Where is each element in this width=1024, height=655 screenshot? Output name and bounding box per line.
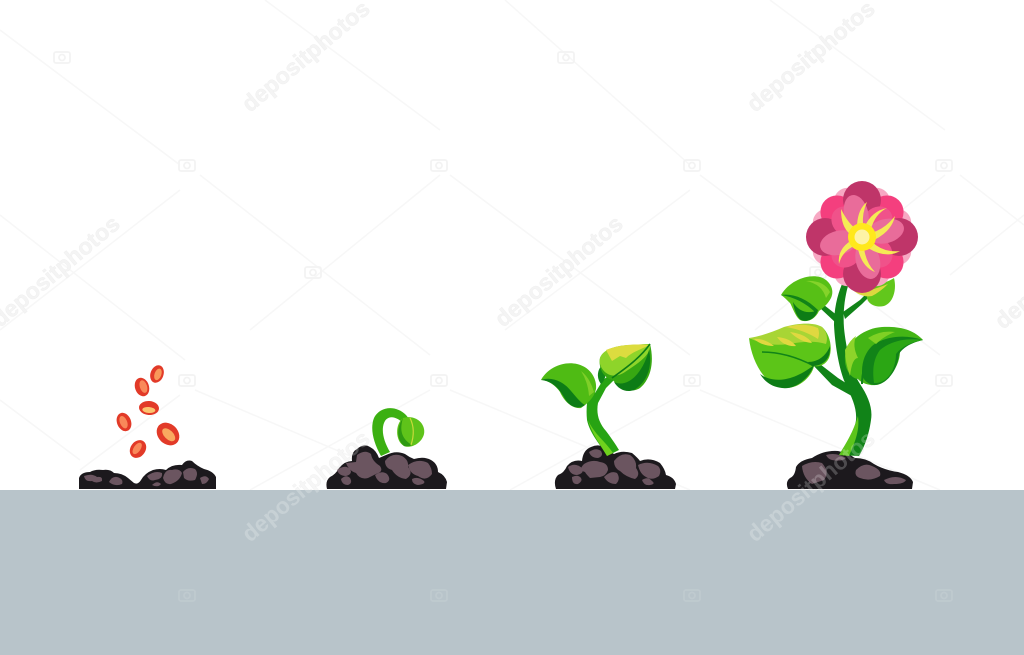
watermark overlay: depositphotos <box>237 425 375 547</box>
big right leaf <box>845 327 923 385</box>
pale back petals <box>809 184 915 290</box>
upper left leaf <box>781 276 832 321</box>
soil mound 1 <box>79 460 216 489</box>
stage 2: sprout and soil <box>326 408 447 489</box>
ground band <box>0 490 1024 655</box>
seeds <box>114 363 184 461</box>
main stem <box>810 284 873 456</box>
stamens <box>839 202 900 272</box>
mid inner petals <box>825 200 899 274</box>
right leaf <box>600 344 652 391</box>
stage 4: flowering plant and soil <box>749 181 923 489</box>
watermark overlay: depositphotos <box>742 425 880 547</box>
stage 3: seedling and soil <box>541 344 676 489</box>
left leaf <box>541 363 596 408</box>
watermark: depositphotos <box>237 425 375 547</box>
sprout stem <box>372 408 410 456</box>
small right leaf <box>851 278 895 307</box>
big left leaf <box>749 324 831 388</box>
small inner leaf <box>598 364 606 384</box>
flower centre <box>848 223 876 251</box>
soil mound 3 <box>555 445 676 489</box>
light inner petals <box>817 192 907 282</box>
flower <box>806 181 918 293</box>
bright corner petals <box>813 188 911 286</box>
seedling stem <box>582 373 619 456</box>
watermark: depositphotos <box>742 425 880 547</box>
stage 1: seeds and soil <box>79 363 216 489</box>
soil mound 4 <box>787 451 913 489</box>
watermark: depositphotos <box>490 210 628 332</box>
sprout leaf <box>397 417 424 447</box>
dark main petals <box>806 181 918 293</box>
watermark overlay <box>237 425 880 547</box>
soil mound 2 <box>326 445 447 489</box>
